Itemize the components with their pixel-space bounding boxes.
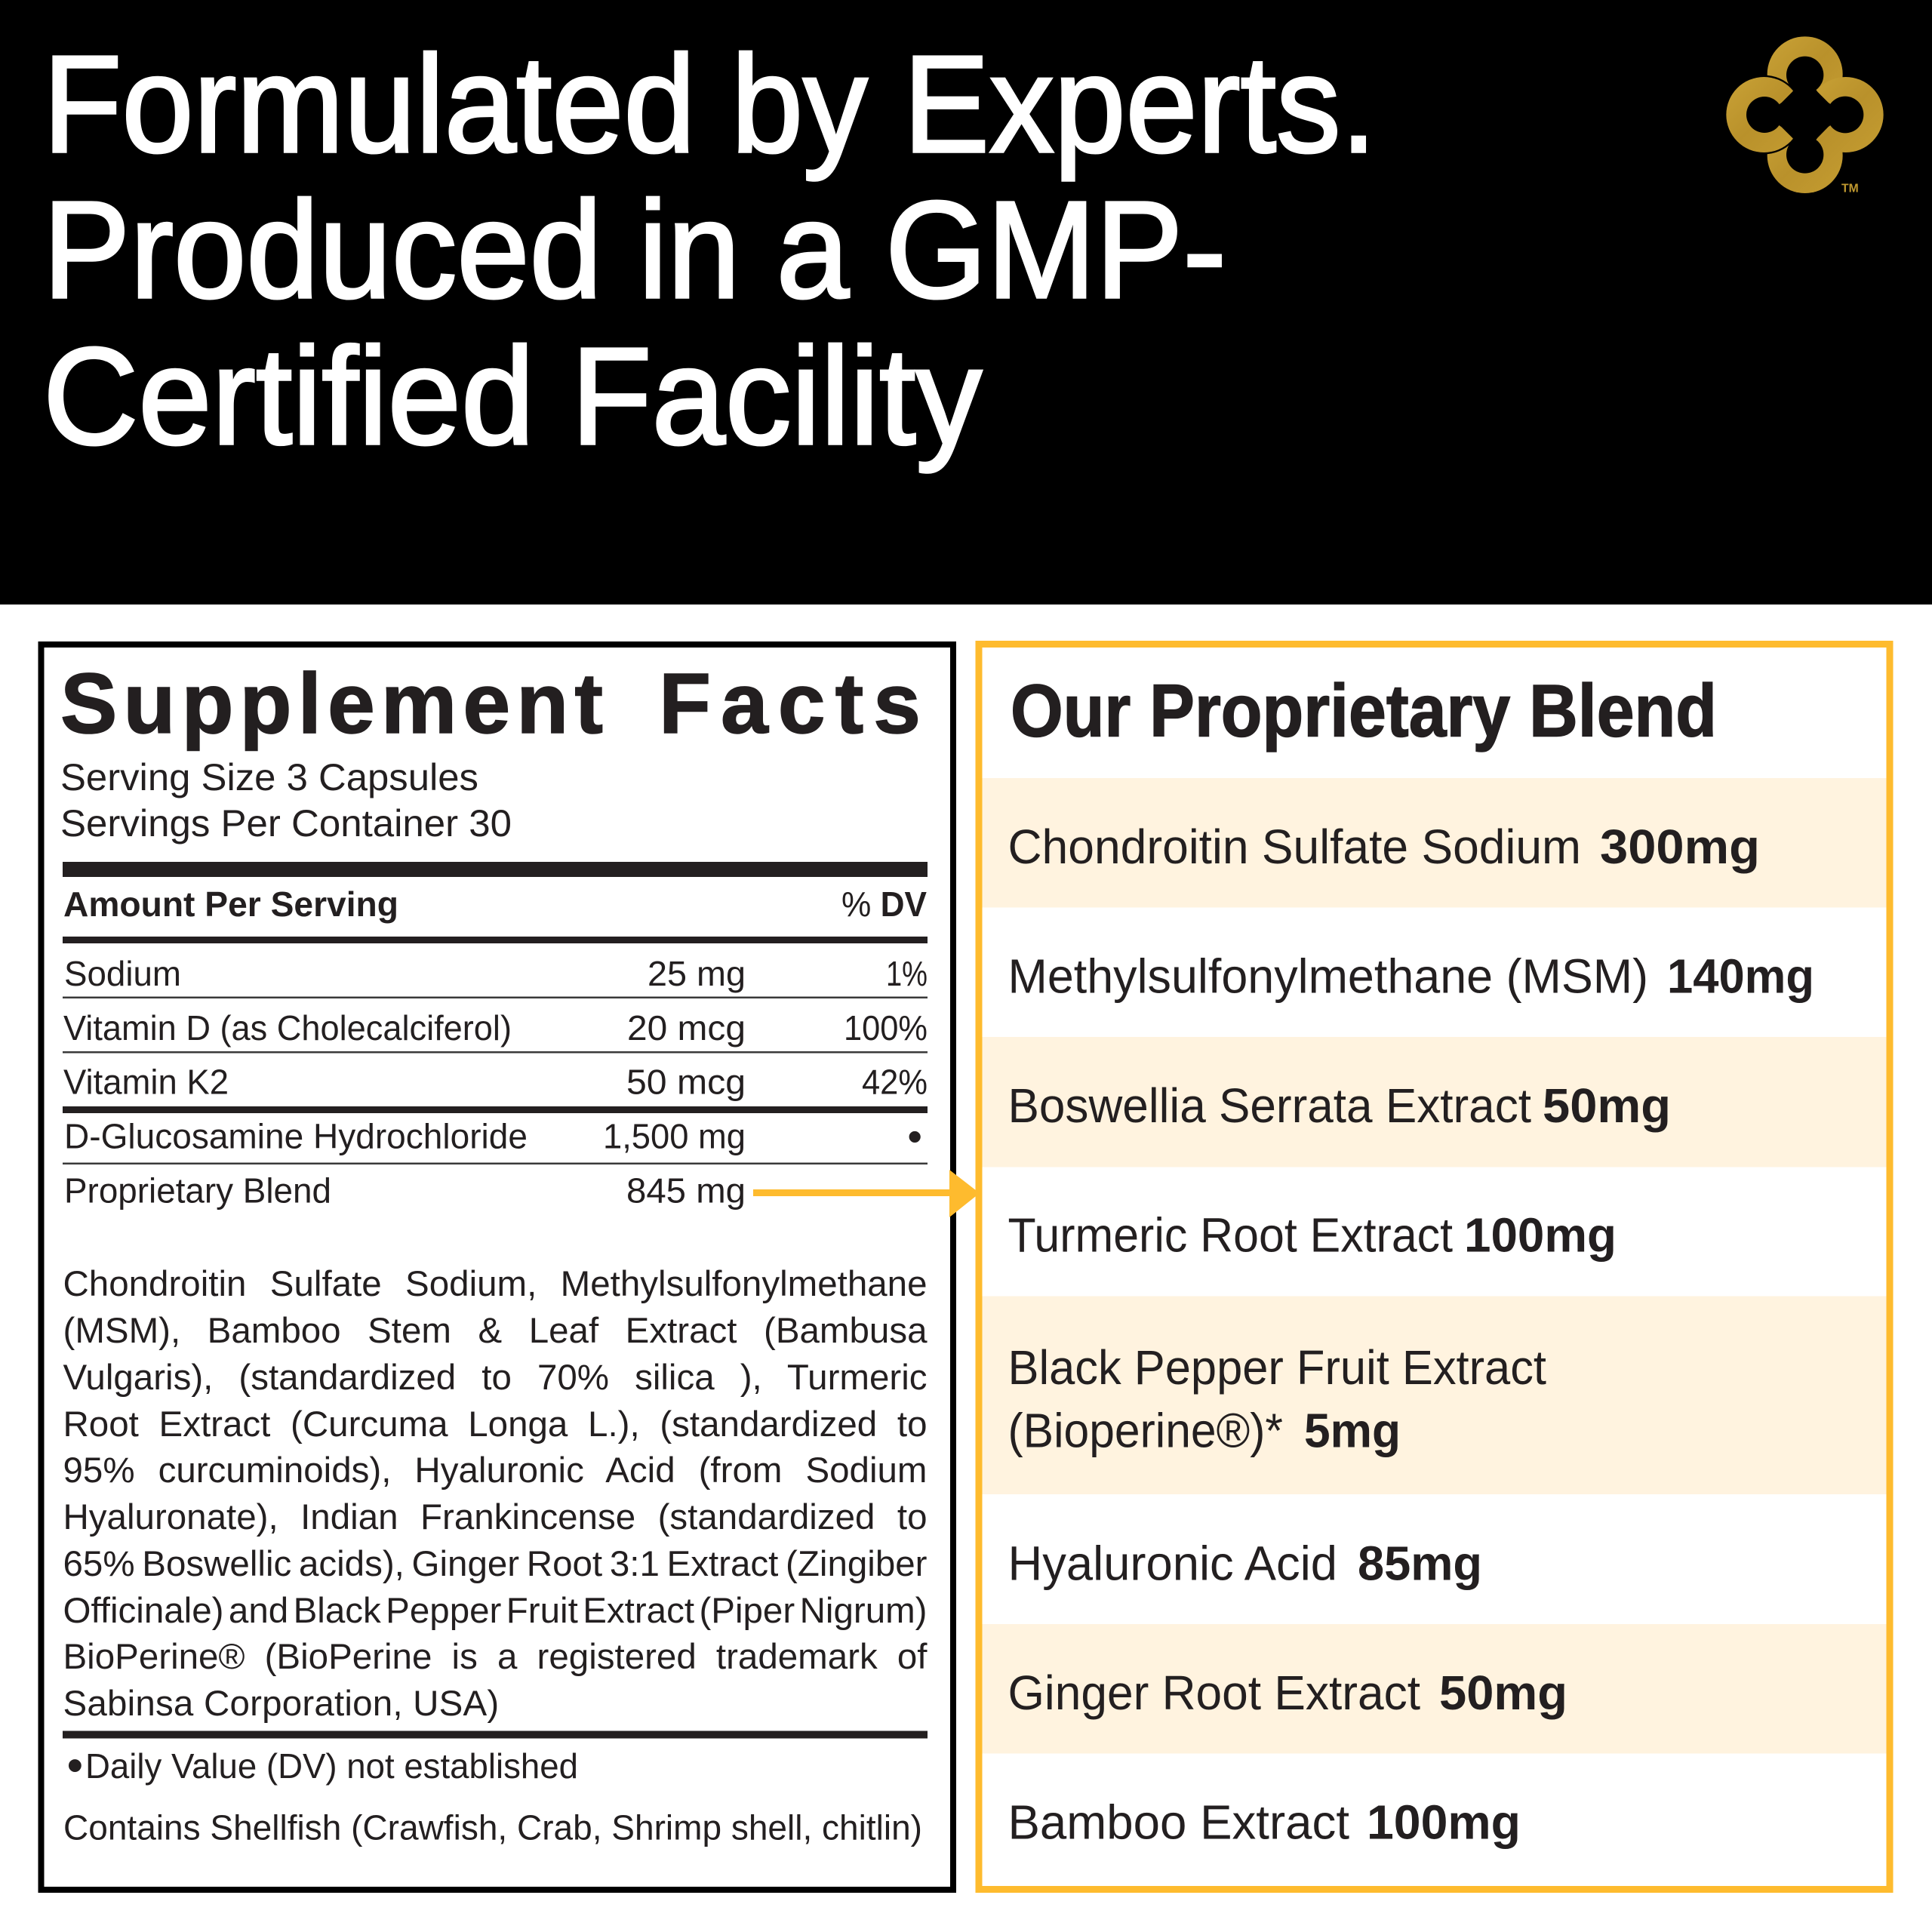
serving information xyxy=(60,755,512,844)
ingredient: black pepper: 5mg xyxy=(1304,1404,1401,1458)
paragraph: ingredient list: BioPerine® (BioPerine is a registered trademark of xyxy=(63,1637,927,1677)
row: vitamin d: 100% xyxy=(844,1008,928,1048)
table header row: Amount Per Serving xyxy=(63,884,398,924)
row: vitamin d: 20 mcg xyxy=(627,1008,746,1048)
heading: supplement facts: Facts xyxy=(659,656,921,751)
paragraph: ingredient list: 95% curcuminoids), Hyaluronic Acid (from Sodium xyxy=(63,1451,927,1491)
heading: supplement facts: Supplement xyxy=(60,656,603,751)
table header row: % DV xyxy=(841,884,927,924)
title xyxy=(43,26,1377,473)
header band xyxy=(0,0,1932,605)
ingredient: hyaluronic acid: Hyaluronic Acid xyxy=(1008,1537,1337,1591)
icon: gold clover logo: TM xyxy=(1841,182,1859,195)
row: sodium: 25 mg xyxy=(648,954,746,993)
panel: our proprietary blend xyxy=(979,645,1890,1890)
row: d-glucosamine: • xyxy=(907,1112,922,1160)
table rules xyxy=(63,862,928,1739)
ingredient: turmeric: Turmeric Root Extract xyxy=(1008,1208,1453,1262)
row: vitamin k2 xyxy=(63,1063,928,1102)
row backgrounds xyxy=(983,778,1887,1754)
row: vitamin k2: 42% xyxy=(862,1063,928,1102)
paragraph: ingredient list: 65% Boswellic acids), Ginger Root 3:1 Extract (Zingiber xyxy=(63,1544,927,1584)
paragraph: ingredient list: Root Extract (Curcuma Longa L.), (standardized to xyxy=(63,1404,927,1444)
serving information: Servings Per Container 30 xyxy=(60,801,512,844)
ingredient: hyaluronic acid: 85mg xyxy=(1358,1537,1482,1591)
ingredient: ginger root: 50mg xyxy=(1439,1666,1567,1720)
row: proprietary blend xyxy=(64,1171,746,1211)
paragraph: ingredient list: Chondroitin Sulfate Sodium, Methylsulfonylmethane xyxy=(63,1264,927,1304)
ingredient: bamboo xyxy=(1008,1795,1521,1849)
row: sodium xyxy=(64,954,928,993)
ingredient: bamboo: 100mg xyxy=(1367,1795,1521,1849)
serving information: Serving Size 3 Capsules xyxy=(60,755,478,798)
ingredient: msm: 140mg xyxy=(1667,949,1814,1004)
ingredient: black pepper xyxy=(1008,1340,1546,1458)
row: d-glucosamine xyxy=(64,1112,922,1160)
title: Formulated by Experts. xyxy=(43,26,1377,181)
row: proprietary blend: 845 mg xyxy=(626,1171,746,1211)
ingredient: black pepper: (Bioperine®)* xyxy=(1008,1404,1283,1458)
table header row xyxy=(63,884,927,924)
row: proprietary blend: Proprietary Blend xyxy=(64,1171,331,1211)
arrow: proprietary blend to panel xyxy=(753,1170,980,1217)
row: vitamin k2: 50 mcg xyxy=(626,1063,746,1102)
ingredient: boswellia: 50mg xyxy=(1543,1078,1671,1133)
paragraph: ingredient list: Officinale) and Black Pepper Fruit Extract (Piper Nigrum) xyxy=(63,1591,927,1631)
footnote: allergens: Contains Shellfish (Crawfish, Crab, Shrimp shell, chitlin) xyxy=(63,1808,922,1847)
paragraph: ingredient list: (MSM), Bamboo Stem & Leaf Extract (Bambusa xyxy=(63,1311,927,1351)
ingredient: black pepper: Black Pepper Fruit Extract xyxy=(1008,1340,1546,1395)
row: vitamin d xyxy=(63,1008,928,1048)
footnote: daily value: • xyxy=(66,1740,83,1792)
paragraph: ingredient list: Hyaluronate), Indian Frankincense (standardized to xyxy=(63,1497,927,1537)
ingredient: chondroitin: 300mg xyxy=(1600,820,1760,874)
heading: supplement facts xyxy=(60,656,921,751)
ingredient: ginger root: Ginger Root Extract xyxy=(1008,1666,1420,1720)
row: sodium: 1% xyxy=(886,954,928,993)
row: d-glucosamine: 1,500 mg xyxy=(603,1117,746,1156)
title: Produced in a GMP- xyxy=(43,172,1226,327)
heading: our proprietary blend: Our Proprietary Blend xyxy=(1011,669,1717,752)
row: d-glucosamine: D-Glucosamine Hydrochloride xyxy=(64,1117,528,1156)
row: vitamin k2: Vitamin K2 xyxy=(63,1063,229,1102)
title: Certified Facility xyxy=(43,318,982,473)
panel: supplement facts xyxy=(41,645,953,1890)
ingredient: boswellia: Boswellia Serrata Extract xyxy=(1008,1078,1531,1133)
paragraph: ingredient list: Vulgaris), (standardized to 70% silica ), Turmeric xyxy=(63,1358,927,1398)
row: sodium: Sodium xyxy=(64,954,181,993)
ingredient: chondroitin: Chondroitin Sulfate Sodium xyxy=(1008,820,1581,874)
ingredient: msm: Methylsulfonylmethane (MSM) xyxy=(1008,949,1648,1004)
ingredient: turmeric: 100mg xyxy=(1464,1208,1617,1262)
icon: gold clover logo xyxy=(1724,36,1884,195)
row: vitamin d: Vitamin D (as Cholecalciferol) xyxy=(63,1008,512,1048)
paragraph: ingredient list xyxy=(63,1264,928,1724)
ingredient: bamboo: Bamboo Extract xyxy=(1008,1795,1349,1849)
footnote: daily value: Daily Value (DV) not established xyxy=(85,1746,578,1786)
paragraph: ingredient list: Sabinsa Corporation, USA) xyxy=(63,1684,499,1724)
